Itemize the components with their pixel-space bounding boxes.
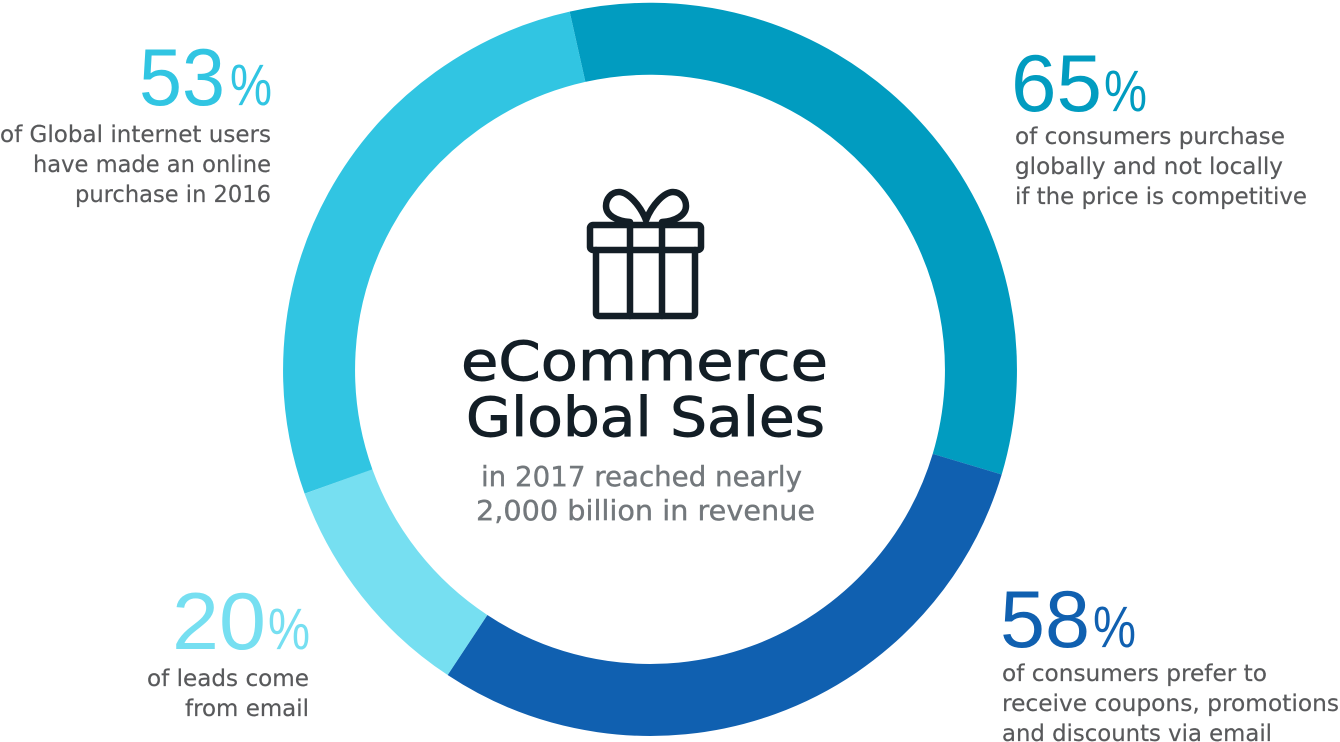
title: Global Sales (466, 386, 825, 449)
segment: 20% (338, 482, 468, 645)
description: purchase in 2016 (75, 180, 271, 208)
number (172, 577, 310, 667)
description: of Global internet users (0, 120, 271, 148)
number: 53 (139, 33, 225, 123)
stat: 65% (1011, 39, 1307, 210)
description: of consumers prefer to (1002, 659, 1267, 687)
subtitle: in 2017 reached nearly (481, 460, 802, 493)
number (1011, 39, 1147, 129)
number: % (1093, 595, 1136, 660)
subtitle (476, 460, 815, 527)
donut chart (319, 39, 981, 700)
number: % (230, 53, 272, 118)
title: eCommerce (461, 330, 828, 393)
segment: 58% (468, 464, 967, 700)
description: from email (185, 694, 309, 722)
subtitle: 2,000 billion in revenue (476, 494, 815, 527)
segment: 65% (578, 39, 981, 464)
description: globally and not locally (1015, 152, 1283, 180)
icon: gift box (590, 192, 701, 316)
stat: 58% (1000, 575, 1339, 742)
description (1002, 659, 1339, 742)
segment: 53% (319, 47, 578, 482)
number (139, 33, 272, 123)
number: 20 (172, 577, 266, 667)
description (0, 120, 271, 208)
number: % (1104, 59, 1147, 124)
description: if the price is competitive (1015, 182, 1307, 210)
description: receive coupons, promotions (1002, 689, 1339, 717)
stat: 53% (0, 33, 272, 208)
number: 58 (1000, 575, 1090, 665)
title (461, 330, 828, 449)
description: of leads come (147, 664, 309, 692)
number: % (268, 597, 310, 662)
number: 65 (1011, 39, 1102, 129)
number (1000, 575, 1136, 665)
description: of consumers purchase (1015, 122, 1285, 150)
stat: 20% (147, 577, 310, 722)
description (1015, 122, 1307, 210)
description: have made an online (33, 150, 271, 178)
description (147, 664, 309, 722)
